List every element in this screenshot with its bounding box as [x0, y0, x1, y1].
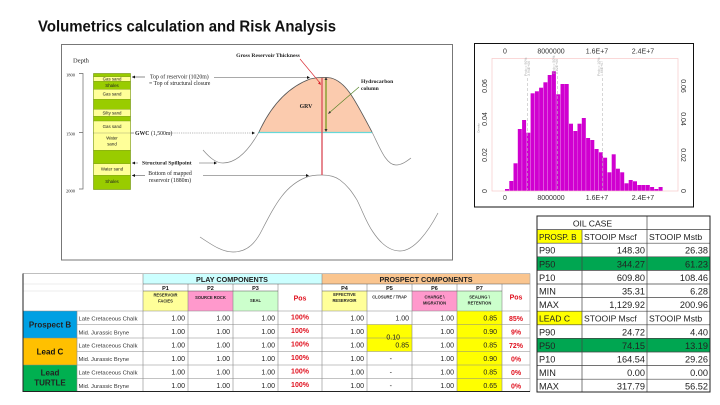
- column names: CLOSURE / TRAP: [372, 294, 407, 300]
- table text: P50: [539, 341, 555, 351]
- play component values: 1.00: [216, 316, 230, 322]
- play pos values: 100%: [291, 342, 310, 348]
- table text: 108.46: [680, 273, 708, 283]
- prospect component values: 1.00: [350, 356, 364, 363]
- reservoir names: Mid. Jurassic Bryne: [78, 330, 129, 336]
- left axis labels: 0.02: [482, 148, 489, 162]
- prospect component values: 1.00: [350, 370, 364, 376]
- top axis labels: 2.4E+7: [632, 48, 654, 56]
- right axis labels: 0: [679, 189, 686, 193]
- bottom axis labels: 0: [503, 195, 507, 202]
- reservoir names: Late Cretaceous Chalk: [78, 344, 138, 350]
- panel: reservoir cross-section diagram: [62, 44, 452, 260]
- title: Volumetrics calculation and Risk Analysis: [38, 18, 336, 36]
- table text: LEAD C: [539, 314, 570, 324]
- prospect component values: -: [390, 356, 393, 363]
- column names: SOURCE ROCK: [195, 295, 226, 300]
- row highlights: [537, 230, 710, 352]
- prospect component values: 1.00: [440, 383, 454, 390]
- column ids: [162, 286, 483, 292]
- gross rock volume area: GRV: [300, 104, 313, 110]
- component colour cells: [143, 291, 502, 311]
- column ids: P2: [207, 286, 214, 292]
- table text: P90: [539, 327, 555, 337]
- prospect component values: 1.00: [440, 356, 454, 363]
- stratigraphic column: Shales: [105, 179, 120, 184]
- prospect component values: 0.90: [483, 356, 497, 363]
- table text: 13.19: [685, 341, 708, 351]
- table text: P50: [539, 259, 555, 269]
- depth scale: 2000: [66, 188, 76, 194]
- table text: 26.38: [685, 246, 708, 256]
- table text: 4.40: [690, 327, 708, 337]
- table text: 56.52: [685, 381, 708, 391]
- prospect pos values: 72%: [509, 343, 524, 350]
- reservoir names: Late Cretaceous Chalk: [78, 370, 138, 376]
- column ids: P5: [386, 286, 393, 292]
- stratigraphic column: Silty sand: [102, 110, 122, 116]
- table text: 609.80: [617, 273, 645, 283]
- column names: RESERVOIR: [332, 298, 357, 303]
- table text: MIN: [539, 368, 556, 378]
- table text: MAX: [539, 381, 559, 391]
- table text: 164.54: [617, 354, 645, 364]
- bottom axis labels: 8000000: [537, 195, 565, 202]
- table text: 200.96: [680, 300, 708, 310]
- prospect component values: 0.85: [483, 316, 497, 322]
- column names: RESERVOIR: [153, 292, 178, 298]
- prospect component values: 0.10: [386, 334, 400, 342]
- prospect component values: 1.00: [350, 383, 364, 390]
- play component values: 1.00: [261, 316, 275, 322]
- bottom axis labels: 2.4E+7: [632, 195, 654, 202]
- play pos values: 100%: [291, 382, 310, 389]
- table text: P90: [539, 246, 555, 256]
- prospect component values: 0.85: [483, 342, 497, 350]
- left axis labels: Density: [476, 123, 480, 133]
- table text: 344.27: [617, 259, 645, 269]
- column names: MIGRATION: [423, 300, 446, 306]
- prospect pos values: 0%: [511, 384, 522, 390]
- table text: 6.28: [690, 286, 708, 296]
- column names: RETENTION: [468, 300, 491, 306]
- play components header: [143, 274, 322, 284]
- left axis labels: 0: [482, 189, 489, 193]
- label: top of reservoir: = Top of structural closure: [149, 80, 211, 87]
- pos headers: Pos: [510, 294, 523, 302]
- grid: [537, 216, 710, 392]
- pos headers: [294, 294, 523, 302]
- table text: 148.30: [617, 246, 645, 256]
- upper structural surface: [203, 132, 411, 165]
- prospect labels: Lead C: [37, 348, 64, 356]
- column ids: P6: [431, 286, 438, 292]
- prospect component values: 1.00: [350, 316, 364, 322]
- table text: 317.79: [617, 381, 645, 391]
- depth scale: 1800: [66, 72, 76, 78]
- hydrocarbon column arrow: Hydrocarbon: [361, 79, 394, 85]
- stratigraphic column: Water sand: [101, 166, 124, 172]
- stratigraphic column: [94, 74, 130, 190]
- play component values: 1.00: [216, 329, 230, 336]
- reservoir names: Late Cretaceous Chalk: [78, 316, 138, 322]
- label: bottom of mapped reservoir: reservoir (1880m): [149, 177, 191, 184]
- percentile labels: 3.94E+06: [527, 61, 531, 76]
- top axis labels: 0: [503, 48, 507, 56]
- prospect pos values: [509, 316, 524, 390]
- percentile labels: Prob = 90%: [524, 58, 528, 76]
- lower structural surface: [200, 175, 438, 252]
- prospect component values: 0.85: [395, 342, 409, 350]
- stratigraphic column: Water: [106, 136, 118, 140]
- reservoir names: Mid. Jurassic Bryne: [78, 384, 129, 390]
- prospect component values: 0.65: [483, 383, 497, 390]
- top axis labels: 1.6E+7: [586, 48, 608, 56]
- prospect components header: PROSPECT COMPONENTS: [379, 275, 473, 284]
- table text: 29.26: [685, 354, 708, 364]
- prospect labels: TURTLE: [34, 378, 66, 388]
- prospect component values: 1.00: [440, 342, 454, 350]
- play component values: 1.00: [216, 383, 230, 390]
- play component values: 1.00: [261, 356, 275, 363]
- pos headers: Pos: [294, 296, 307, 302]
- plot frame: [492, 58, 678, 191]
- bottom axis labels: 1.6E+7: [586, 195, 608, 202]
- hydrocarbon column arrow: column: [361, 86, 380, 92]
- prospect component values: 1.00: [350, 342, 364, 350]
- yellow highlighted cells: [367, 311, 502, 391]
- table text: P10: [539, 273, 555, 283]
- column names: [153, 292, 491, 306]
- table text: MAX: [539, 300, 559, 310]
- top axis labels: [503, 48, 654, 56]
- label: depth: Depth: [73, 58, 90, 64]
- table text: P10: [539, 354, 555, 364]
- play component values: 1.00: [171, 329, 185, 336]
- prospect component values: 1.00: [440, 316, 454, 322]
- stratigraphic column: sand: [107, 142, 117, 146]
- table text: STOOIP Mstb: [649, 232, 702, 242]
- label: top of reservoir: [132, 74, 310, 87]
- table grid: [23, 274, 530, 391]
- right axis labels: 0.06: [679, 79, 686, 93]
- stratigraphic column: Gas sand: [103, 77, 122, 82]
- table text: STOOIP Mstb: [649, 314, 702, 324]
- column names: SEAL: [250, 298, 261, 303]
- right axis labels: [679, 79, 686, 193]
- panel: oil case table: [537, 216, 710, 392]
- column names: FACIES: [158, 298, 173, 304]
- play component values: 1.00: [261, 342, 275, 350]
- prospect pos values: 85%: [509, 316, 524, 323]
- percentile markers: [528, 76, 602, 190]
- table text: STOOIP Mscf: [584, 232, 637, 242]
- panel: probability histogram: [474, 44, 694, 207]
- left axis labels: [476, 79, 489, 193]
- column ids: P3: [252, 286, 259, 292]
- play component values: 1.00: [216, 342, 230, 350]
- play pos values: 100%: [291, 328, 310, 335]
- prospect component values: 0.90: [483, 329, 497, 336]
- prospect pos values: 9%: [511, 330, 522, 336]
- play components header: PLAY COMPONENTS: [196, 275, 268, 284]
- play component values: 1.00: [216, 370, 230, 376]
- table text: 61.23: [685, 259, 708, 269]
- play component values: 1.00: [171, 383, 185, 390]
- column names: CHARGE \: [424, 294, 445, 300]
- label: bottom of mapped reservoir: Bottom of mapped: [148, 170, 192, 177]
- prospect component values: 1.00: [350, 329, 364, 336]
- right axis labels: 0.04: [679, 112, 686, 126]
- play pos values: [291, 314, 310, 389]
- stratigraphic column: Gas sand: [103, 92, 122, 96]
- table text: STOOIP Mscf: [584, 314, 637, 324]
- table text: 0.00: [690, 368, 708, 378]
- table text: [539, 218, 708, 391]
- prospect component values: 1.00: [395, 316, 409, 322]
- prospect component values: 1.00: [440, 329, 454, 336]
- play component values: 1.00: [171, 370, 185, 376]
- label: gas water contact: [131, 130, 255, 137]
- play component values: 1.00: [171, 316, 185, 322]
- gross reservoir thickness arrow: Gross Reservoir Thickness: [236, 53, 301, 59]
- right axis labels: 0.02: [679, 148, 686, 162]
- table text: 35.31: [622, 286, 645, 296]
- stratigraphic column: Gas sand: [103, 124, 122, 129]
- reservoir names: [78, 316, 138, 390]
- left axis labels: 0.06: [482, 79, 489, 93]
- prospect component values: 1.00: [440, 370, 454, 376]
- play pos values: 100%: [291, 314, 310, 322]
- table text: OIL CASE: [573, 218, 612, 228]
- play component values: 1.00: [261, 370, 275, 376]
- column names: SEALING \: [469, 294, 491, 300]
- play component values: 1.00: [171, 356, 185, 363]
- column ids: P7: [476, 286, 483, 292]
- table text: MIN: [539, 286, 556, 296]
- play pos values: 100%: [291, 368, 310, 376]
- label: structural spillpoint: Structural Spillpoint: [142, 161, 192, 167]
- percentile labels: 1.66E+07: [600, 61, 604, 76]
- column names: EFFECTIVE: [333, 292, 356, 297]
- percentile labels: [524, 56, 604, 76]
- prospect component values: [350, 316, 497, 390]
- panel: risk analysis table: [23, 274, 530, 392]
- prospect labels: [23, 311, 77, 391]
- table text: PROSP. B: [539, 233, 577, 242]
- reservoir names: Mid. Jurassic Bryne: [78, 357, 129, 363]
- label: structural spillpoint: [132, 161, 217, 167]
- percentile labels: Prob = 10%: [597, 58, 601, 76]
- play component values: 1.00: [261, 329, 275, 336]
- hydrocarbon column arrow: [324, 77, 394, 132]
- label: gas water contact: GWC (1,500m): [135, 130, 172, 137]
- prospect components header: [322, 274, 530, 284]
- table text: 1,129.92: [609, 300, 645, 310]
- play pos values: 100%: [291, 355, 310, 362]
- label: top of reservoir: Top of reservoir (1020m): [150, 74, 209, 80]
- play component values: 1.00: [216, 356, 230, 363]
- prospect component values: -: [390, 370, 393, 376]
- table text: 0.00: [627, 368, 645, 378]
- play component values: [171, 316, 275, 390]
- top axis labels: 8000000: [537, 48, 565, 56]
- bottom axis labels: [503, 195, 654, 202]
- gross reservoir thickness arrow: [236, 53, 322, 175]
- play component values: 1.00: [171, 342, 185, 350]
- prospect component values: -: [390, 383, 393, 390]
- play component values: 1.00: [261, 383, 275, 390]
- percentile labels: 8.82E+06: [555, 59, 559, 74]
- table text: 74.15: [622, 341, 645, 351]
- prospect labels: Lead: [41, 368, 59, 378]
- prospect pos values: 0%: [511, 370, 522, 377]
- prospect component values: 0.85: [483, 370, 497, 376]
- column ids: P1: [162, 286, 169, 292]
- left axis labels: 0.04: [482, 112, 489, 126]
- depth scale: 1500: [66, 132, 76, 136]
- prospect labels: Prospect B: [29, 320, 71, 330]
- depth scale: [66, 72, 83, 194]
- label: bottom of mapped reservoir: [132, 170, 309, 184]
- gross rock volume area: [258, 77, 372, 132]
- column ids: P4: [341, 286, 349, 292]
- table text: 24.72: [622, 327, 645, 337]
- percentile labels: Prob = 50%: [552, 56, 556, 74]
- stratigraphic column: Shales: [105, 83, 120, 88]
- prospect pos values: 0%: [511, 356, 522, 364]
- magenta bars: [505, 71, 663, 191]
